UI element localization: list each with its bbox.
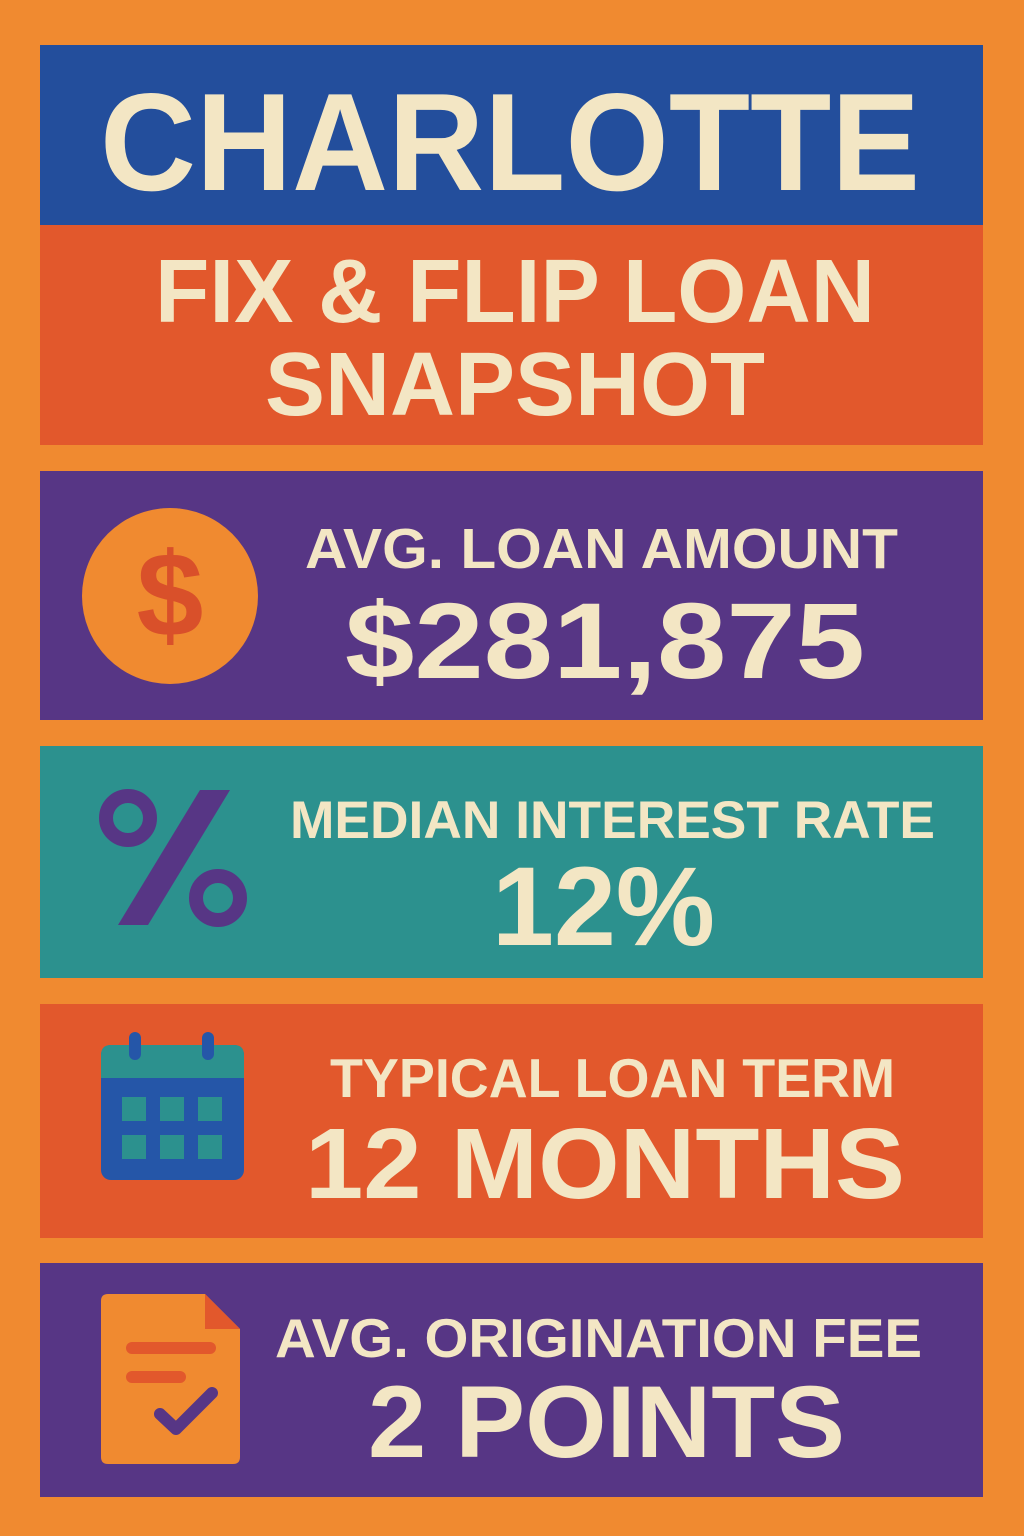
icon: dollar coin — [82, 508, 258, 684]
title band — [40, 45, 983, 225]
label: typical loan term: TYPICAL LOAN TERM — [330, 1047, 895, 1109]
label: median interest rate: MEDIAN INTEREST RATE — [290, 791, 935, 850]
subtitle: SNAPSHOT — [265, 335, 765, 435]
subtitle — [155, 242, 875, 435]
label: avg loan amount: AVG. LOAN AMOUNT — [305, 517, 898, 581]
panel: median interest rate — [40, 746, 983, 978]
title: CHARLOTTE — [100, 65, 920, 220]
value: 12 months: 12 MONTHS — [305, 1108, 905, 1220]
icon: calendar — [101, 1032, 244, 1180]
icon: dollar coin: $ — [137, 528, 203, 662]
subtitle: FIX & FLIP LOAN — [155, 242, 875, 342]
icon: document with check — [101, 1294, 240, 1464]
value: 2 points: 2 POINTS — [368, 1365, 845, 1479]
label: avg origination fee: AVG. ORIGINATION FEE — [275, 1307, 922, 1369]
panel: origination fee — [40, 1263, 983, 1497]
panel: typical loan term — [40, 1004, 983, 1238]
value: $281,875: $281,875 — [345, 580, 865, 701]
icon: percent — [106, 790, 240, 925]
panel: average loan amount — [40, 471, 983, 720]
value: 12%: 12% — [492, 844, 715, 969]
subtitle band — [40, 225, 983, 445]
